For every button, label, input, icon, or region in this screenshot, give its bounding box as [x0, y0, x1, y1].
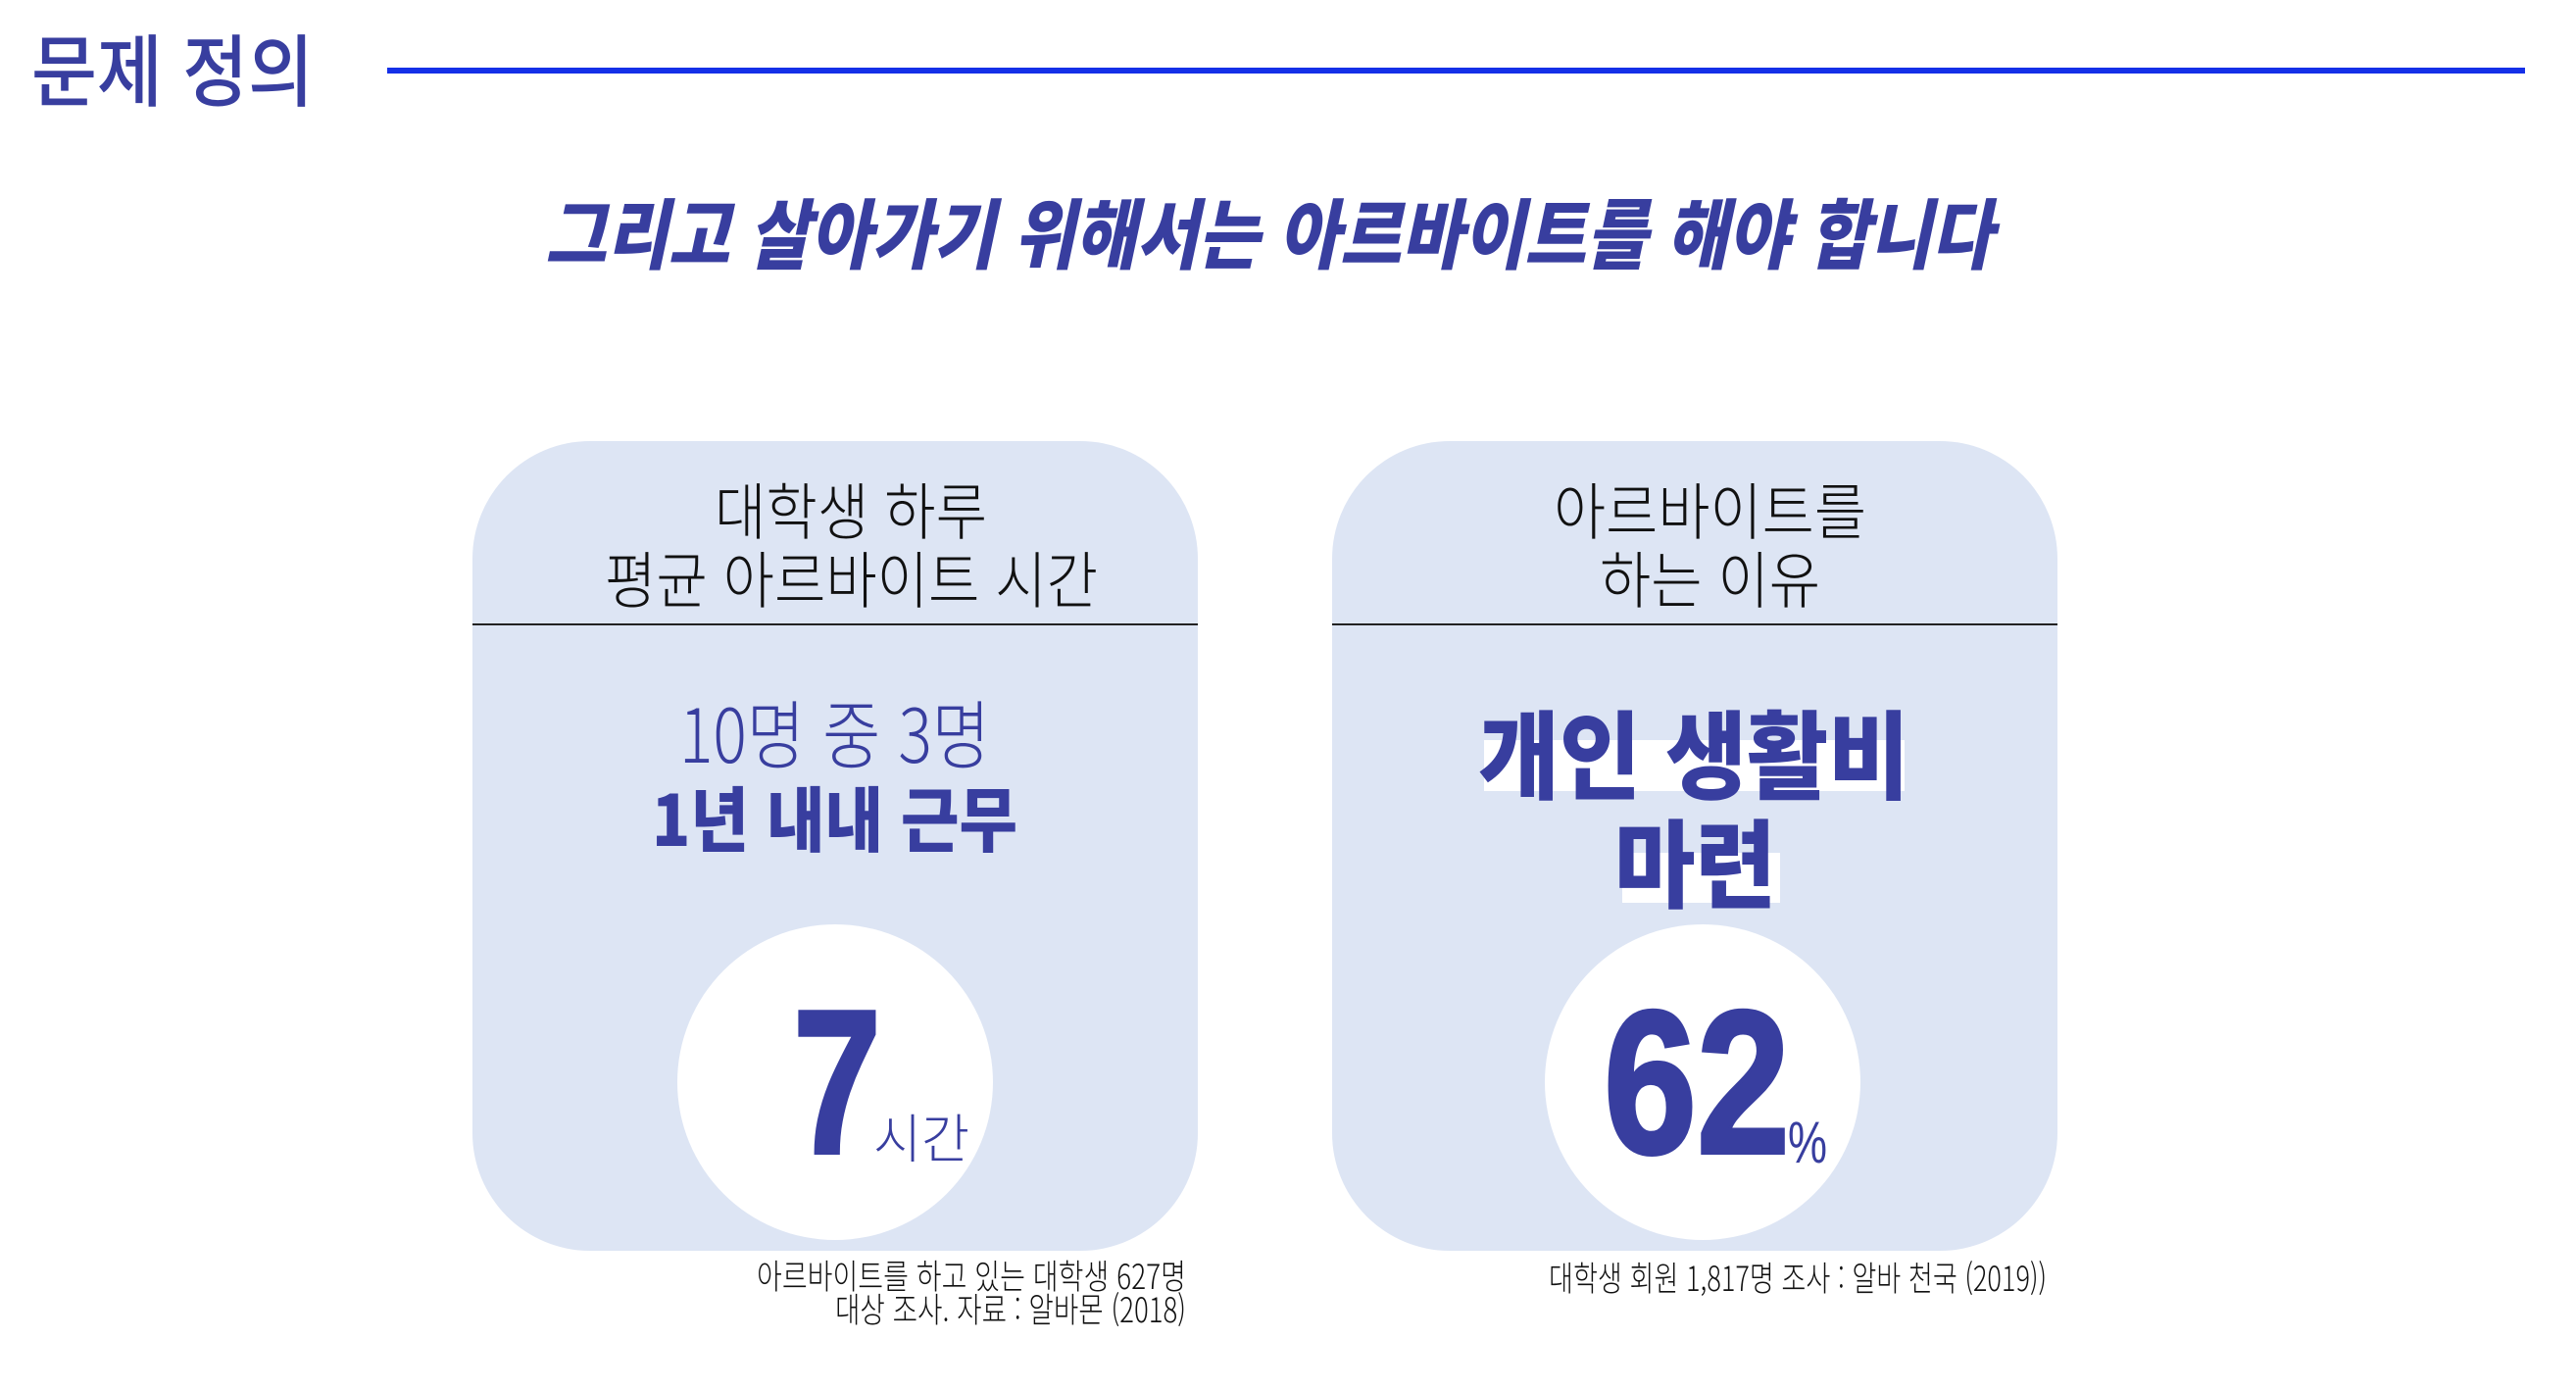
white circle	[1545, 924, 1860, 1240]
title rule	[387, 68, 2525, 74]
white circle	[677, 924, 993, 1240]
panel header: 대학생 하루	[715, 464, 987, 553]
panel: reason for working	[1332, 441, 2057, 1302]
highlighted statement: 개인 생활비	[1478, 680, 1909, 819]
statistic description: 1년 내내 근무	[652, 764, 1017, 867]
source note: 아르바이트를 하고 있는 대학생 627명	[757, 1250, 1186, 1300]
highlighted statement: 마련	[1614, 789, 1776, 928]
source note: 대상 조사. 자료 : 알바몬 (2018)	[835, 1283, 1186, 1333]
statistic description: 10명 중 3명	[679, 676, 990, 784]
statistic description	[652, 676, 1017, 867]
panel header: 평균 아르바이트 시간	[605, 532, 1098, 621]
big number: 7 hours: 7	[793, 968, 881, 1197]
panel header: 아르바이트를	[1554, 464, 1866, 553]
header divider	[472, 623, 1198, 625]
big number: 7 hours: 시간	[873, 1096, 969, 1173]
big number: 7 hours	[793, 968, 969, 1197]
highlighted statement	[1478, 680, 1909, 928]
panel background	[1332, 441, 2057, 1251]
big number: 62 percent: %	[1788, 1110, 1827, 1175]
big number: 62 percent: 62	[1604, 969, 1790, 1197]
header divider	[1332, 623, 2057, 625]
main heading: 그리고 살아가기 위해서는 아르바이트를 해야 합니다	[540, 174, 2011, 285]
source note	[757, 1250, 1186, 1333]
panel header	[605, 464, 1098, 621]
panel header	[1554, 464, 1866, 621]
panel header: 하는 이유	[1600, 532, 1820, 621]
section title: 문제 정의	[31, 10, 314, 124]
panel: average working hours	[472, 441, 1198, 1333]
panel background	[472, 441, 1198, 1251]
source note: 대학생 회원 1,817명 조사 : 알바 천국 (2019))	[1549, 1252, 2047, 1302]
